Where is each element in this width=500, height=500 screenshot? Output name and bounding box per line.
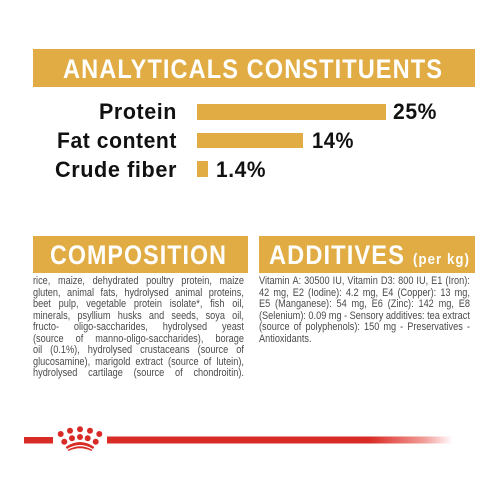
text block: composition: beet [33, 298, 51, 310]
text block: additives: Sensory [350, 310, 383, 322]
text block: additives: 42 [259, 286, 269, 298]
text block: additives: (Iron): [445, 275, 470, 287]
text block: composition: extract [135, 356, 163, 368]
text block: composition: yeast [222, 321, 244, 333]
text block: additives: mg, [439, 298, 454, 310]
text block: additives: additives: [386, 310, 425, 322]
text block: additives: 54 [336, 298, 347, 310]
text block: composition: and [149, 310, 164, 322]
text block: additives: E6 [372, 298, 383, 310]
text block: composition: hydrolysed [88, 344, 132, 356]
text block: composition: (0.1%), [50, 344, 80, 356]
text block: composition: proteins, [209, 286, 244, 298]
text block: additives: E8 [459, 298, 470, 310]
text block: composition: hydrolysed [163, 321, 207, 333]
text block: composition: of [204, 356, 211, 368]
text block: additives: E2 [293, 286, 304, 298]
icon: crown [58, 426, 102, 451]
footer: right red line fading out [107, 436, 453, 444]
text block: composition: marigold [95, 356, 130, 368]
text block: additives: 13 [440, 286, 451, 298]
text block: additives: 30500 [304, 275, 330, 287]
text block: composition: hydrolysed [33, 367, 77, 379]
text block: composition: oil, [232, 310, 244, 322]
text block: composition: maize, [58, 275, 85, 287]
text block: composition: hydrolysed [124, 286, 169, 298]
text block: composition: protein, [181, 275, 212, 287]
text block: additives: 4.2 [346, 286, 359, 298]
text block: composition: seeds, [171, 310, 198, 322]
text block: composition: soya [206, 310, 225, 322]
bar: crude fiber [197, 161, 208, 177]
text block: composition: (source [168, 356, 199, 368]
text block: additives: Vitamin [259, 275, 289, 287]
banner: additives: (per kg) [413, 251, 470, 268]
text block: composition: of [236, 344, 244, 356]
text block: composition: (source [198, 344, 228, 356]
banner: additives [259, 236, 475, 273]
text block: composition: poultry [146, 275, 174, 287]
text block: additives: A: [292, 275, 301, 287]
text block: composition: (source [134, 367, 164, 379]
text block: additives: tea [427, 310, 440, 322]
text block: additives: Antioxidants. [259, 332, 312, 344]
text block: additives: E1 [431, 275, 442, 287]
text block: additives: (Manganese): [275, 298, 332, 310]
bar: fat content [197, 133, 303, 148]
text block: additives: mg [329, 310, 342, 322]
text block: composition: of [175, 367, 183, 379]
bar: protein [197, 104, 386, 120]
text block: composition: of [76, 332, 83, 344]
text block: additives: 0.09 [308, 310, 326, 322]
text block: composition: animal [175, 286, 202, 298]
text block: additives: - [467, 321, 470, 333]
text block: composition: oil, [232, 298, 244, 310]
text block: additives: Vitamin [347, 275, 378, 287]
text block: composition: cartilage [88, 367, 123, 379]
text block: additives: IU, [416, 275, 428, 287]
text block: composition: pulp, [59, 298, 79, 310]
text block: additives: mg, [273, 286, 289, 298]
text block: additives: 150 [364, 321, 379, 333]
text block: composition: protein [134, 298, 162, 310]
text block: additives: - [344, 310, 347, 322]
text block: composition: minerals, [33, 310, 70, 322]
text block: additives: IU, [333, 275, 344, 287]
banner: composition: COMPOSITION [50, 240, 227, 270]
text block: additives: mg [383, 321, 396, 333]
text block: composition: animal [67, 286, 94, 298]
text block: composition: fish [210, 298, 224, 310]
text block: composition: fructo- [33, 321, 59, 333]
text block: additives: D3: [381, 275, 395, 287]
text block: composition: oil [33, 344, 42, 356]
text block: composition: psyllium [77, 310, 111, 322]
text block: composition: crustaceans [140, 344, 190, 356]
text block: composition: maize [219, 275, 244, 287]
text block: additives: (Copper): [397, 286, 436, 298]
text block: composition: lutein), [216, 356, 244, 368]
text block: additives: E4 [382, 286, 393, 298]
text block: additives: extract [442, 310, 470, 322]
text block: additives: mg, [352, 298, 367, 310]
text block: composition: vegetable [86, 298, 126, 310]
text block: composition [33, 275, 244, 379]
text block: additives: E5 [259, 298, 270, 310]
text block: additives: 800 [398, 275, 413, 287]
value: crude fiber: 1.4% [216, 157, 266, 182]
label: fat content: Fat content [57, 128, 177, 153]
text block: additives: (source [259, 321, 290, 333]
text block: composition: (source [33, 332, 64, 344]
text block: composition: borage [215, 332, 244, 344]
text block: additives: Preservatives [407, 321, 463, 333]
footer: left red line [24, 437, 53, 444]
text block: additives: of [294, 321, 301, 333]
text block: composition: glucosamine), [33, 356, 90, 368]
text block: additives: mg, [455, 286, 470, 298]
text block: additives: polyphenols): [305, 321, 360, 333]
text block: composition: manno-oligo-saccharides), [95, 332, 203, 344]
value: protein: 25% [393, 99, 437, 124]
label: protein: Protein [99, 99, 177, 124]
value: fat content: 14% [312, 128, 354, 153]
text block: additives: 142 [418, 298, 434, 310]
text block: composition: gluten, [33, 286, 61, 298]
label: crude fiber: Crude fiber [55, 157, 177, 182]
text block: composition: fats, [101, 286, 118, 298]
text block: composition: dehydrated [93, 275, 139, 287]
banner: analyticals constituents: ANALYTICALS CONSTITUENTS [63, 54, 443, 84]
text block: composition: husks [118, 310, 142, 322]
text block: additives: mg, [363, 286, 378, 298]
text block: composition: rice, [33, 275, 50, 287]
text block: composition: chondroitin). [193, 367, 244, 379]
text block: additives [259, 275, 470, 344]
text block: additives: (Iodine): [308, 286, 342, 298]
text block: composition: isolate*, [170, 298, 202, 310]
text block: additives: (Selenium): [259, 310, 306, 322]
text block: additives: (Zinc): [388, 298, 414, 310]
text block: composition: oligo-saccharides, [74, 321, 148, 333]
banner: additives: ADDITIVES [269, 240, 405, 270]
text block: additives: - [400, 321, 403, 333]
